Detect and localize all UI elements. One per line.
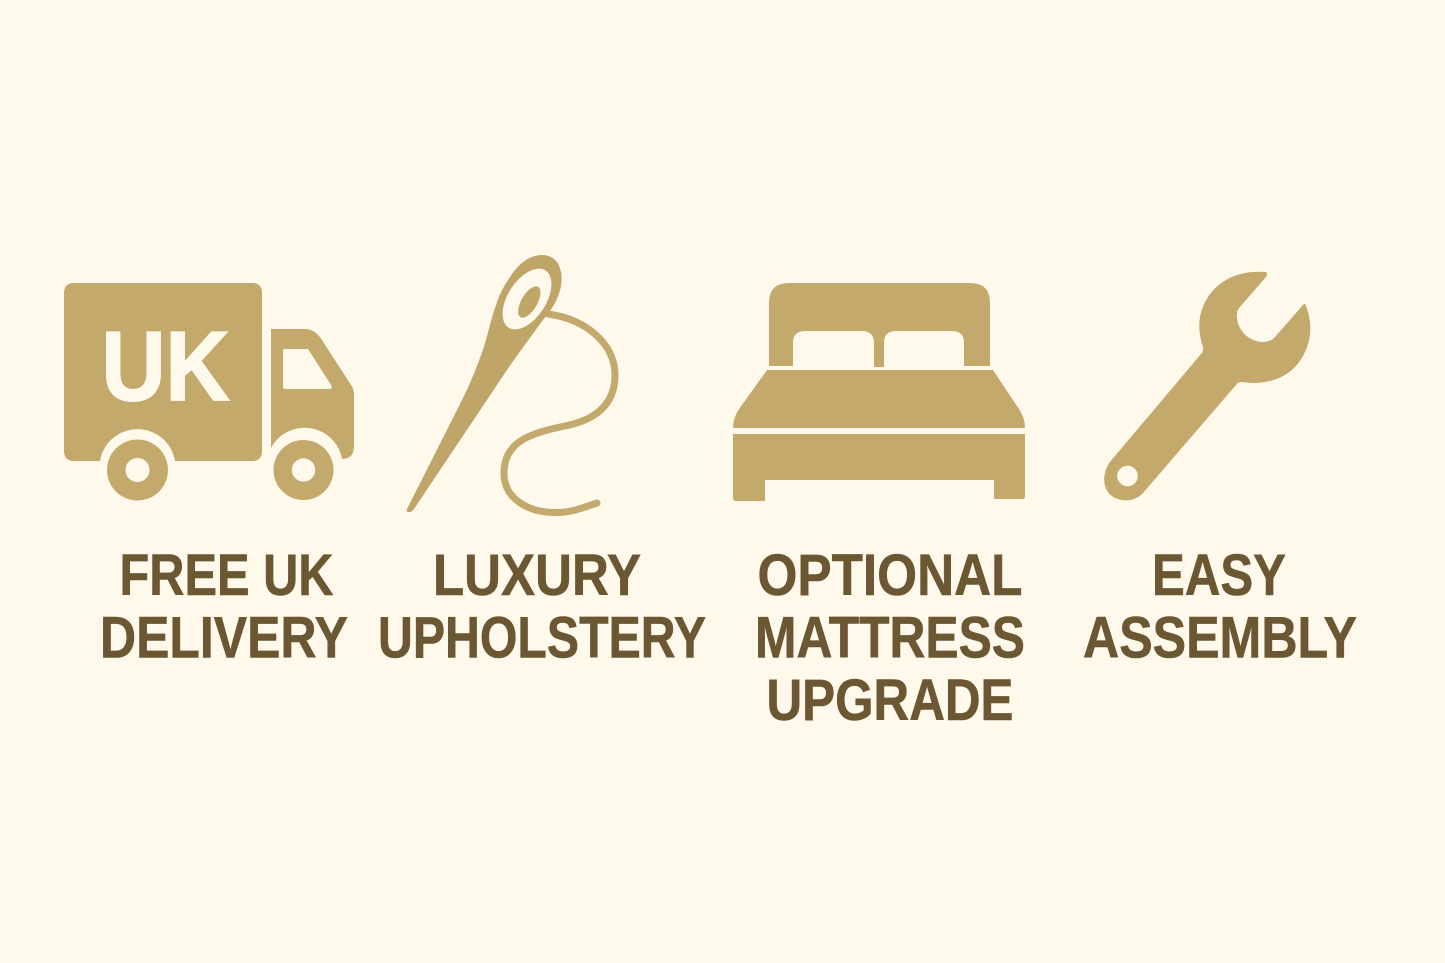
icon: wrench [1104,272,1310,500]
wrench hole [1117,466,1138,486]
icon: needle and thread [407,255,615,513]
label: optional mattress upgrade: MATTRESS [755,606,1025,670]
label: luxury upholstery [378,543,706,670]
icon: delivery truck [64,283,354,500]
label: easy assembly: ASSEMBLY [1083,606,1357,670]
label: free UK delivery [100,543,348,670]
truck box [64,283,262,461]
label: optional mattress upgrade [755,543,1025,733]
icon: bed [733,283,1025,501]
label: free UK delivery: FREE UK [120,543,334,608]
wrench body [1104,272,1310,500]
rear wheel [107,440,168,500]
mattress [733,370,1025,428]
thread [504,314,615,513]
needle eye [493,260,561,338]
label: luxury upholstery: LUXURY [433,543,641,608]
label: easy assembly [1083,543,1357,670]
label: easy assembly: EASY [1152,543,1286,608]
front wheel [274,440,334,500]
bed base [733,434,1025,501]
eye centre [514,283,545,321]
UK lettering: UK [102,311,230,421]
label: optional mattress upgrade: OPTIONAL [758,543,1022,608]
truck cab [271,329,354,459]
label: luxury upholstery: UPHOLSTERY [378,606,706,670]
label: free UK delivery: DELIVERY [100,606,348,670]
label: optional mattress upgrade: UPGRADE [766,668,1014,733]
cab window [283,349,332,389]
headboard [769,283,990,367]
needle body [407,255,562,512]
